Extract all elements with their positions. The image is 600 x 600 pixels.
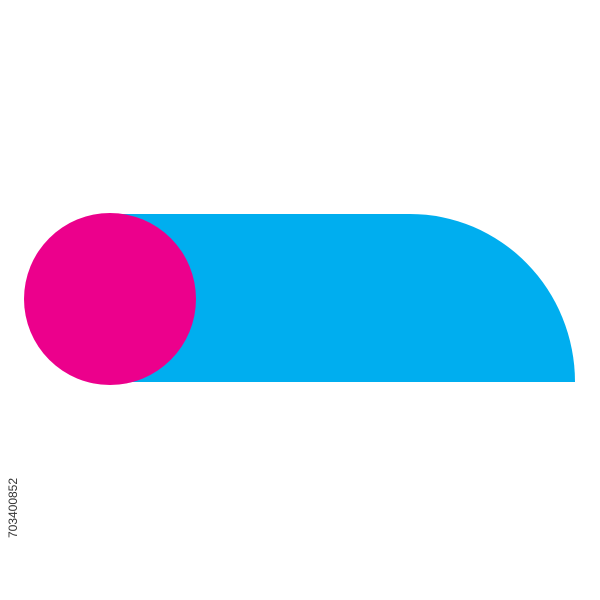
magenta circle bbox=[24, 213, 196, 385]
stock id text: 703400852 bbox=[6, 478, 20, 538]
blue bar shape bbox=[110, 214, 575, 382]
